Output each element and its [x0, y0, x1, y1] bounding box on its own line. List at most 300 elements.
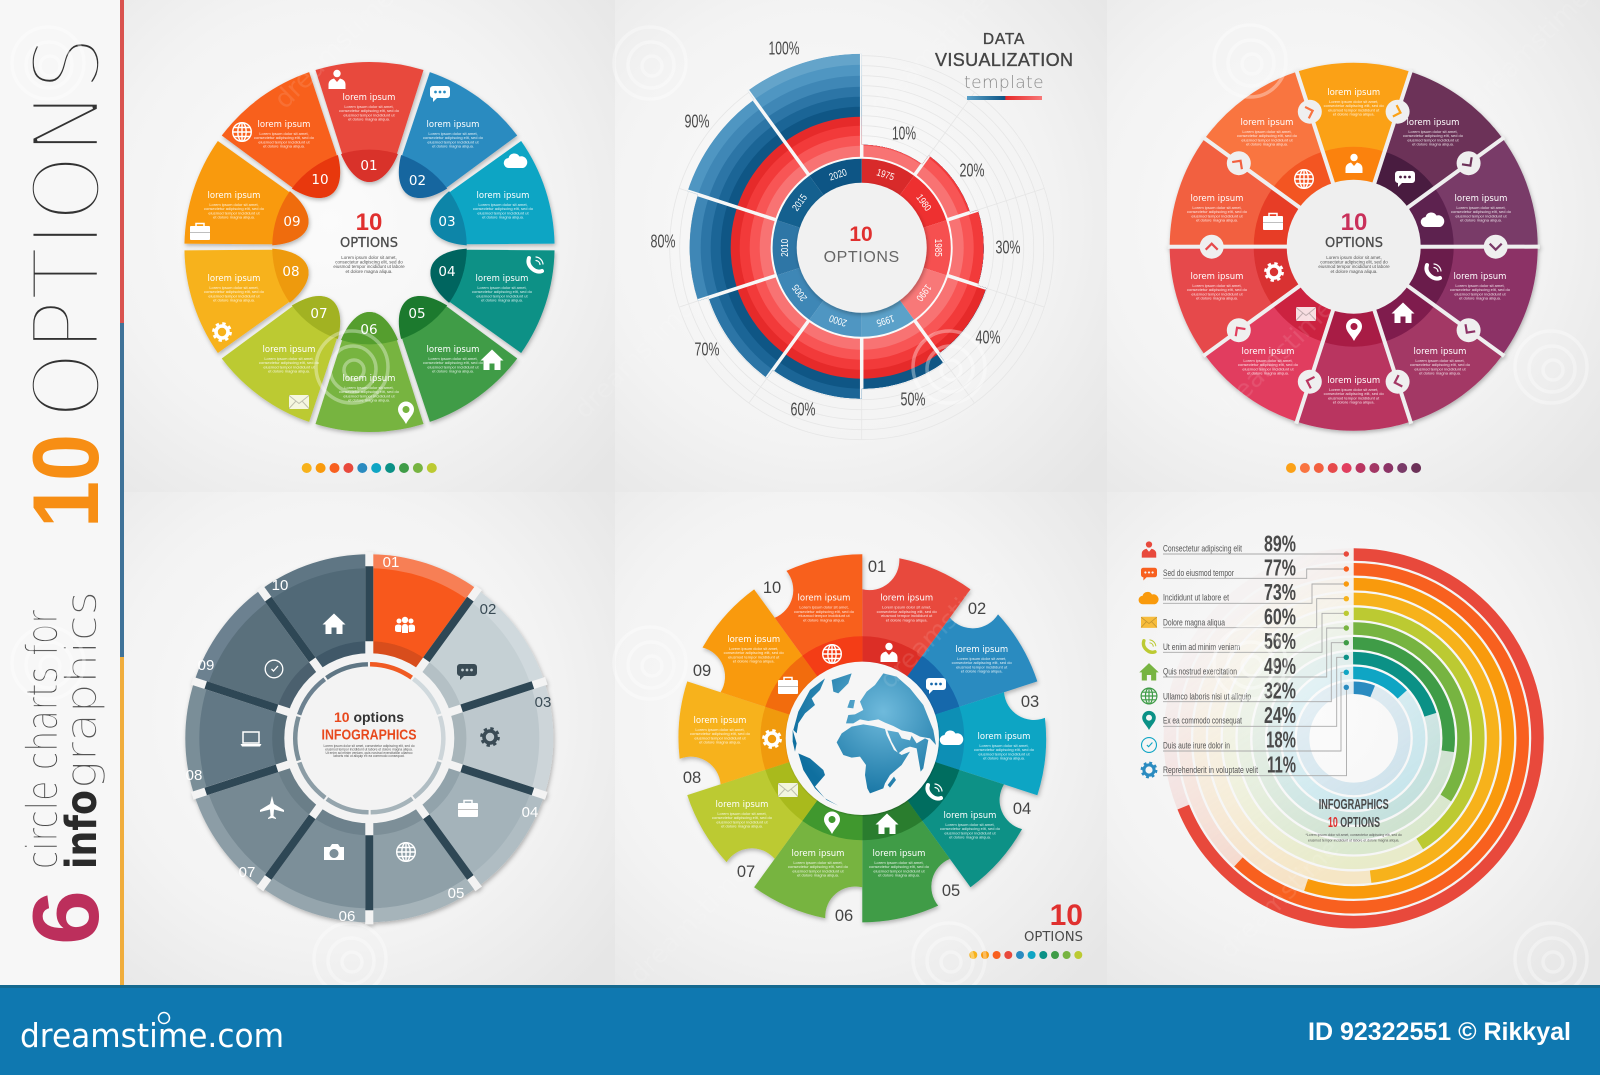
percent labels: 20% — [960, 160, 984, 180]
chevron connectors — [1200, 100, 1508, 394]
option 01: consectetur adipiscing elit, sed do — [1324, 103, 1384, 108]
option 02: et dolore magna aliqua. — [432, 144, 474, 149]
centre heading: 10 OPTIONS — [1328, 814, 1380, 831]
option 08 — [177, 216, 324, 356]
option 05 — [1392, 302, 1471, 376]
list row 10: 11% — [1267, 751, 1296, 777]
option 05: et dolore magna aliqua. — [1419, 371, 1461, 376]
option 03: Lorem ipsum dolor sit amet, — [1456, 205, 1506, 210]
list row 3 — [1139, 579, 1296, 605]
option 09 — [693, 635, 798, 694]
option 09: eiusmod tempor incididunt ut — [1191, 213, 1243, 218]
option 03: Lorem ipsum dolor sit amet, — [478, 202, 528, 207]
centre heading: 10 — [1341, 209, 1367, 236]
title: data visualization template: VISUALIZATION — [935, 50, 1073, 70]
option 04: consectetur adipiscing elit, sed do — [940, 826, 1001, 831]
centre heading — [1318, 209, 1390, 274]
option 02: consectetur adipiscing elit, sed do — [952, 660, 1012, 665]
corner heading: 10 — [1050, 899, 1083, 932]
sector numbers: 04 — [522, 804, 538, 821]
option 04: Lorem ipsum dolor sit amet, — [477, 285, 527, 290]
option 03 — [415, 138, 562, 278]
option 02: consectetur adipiscing elit, sed do — [423, 135, 484, 140]
option 04 — [927, 784, 1031, 840]
option 01: consectetur adipiscing elit, sed do — [339, 108, 400, 113]
option 06: lorem ipsum — [343, 374, 395, 384]
option 09: et dolore magna aliqua. — [1196, 218, 1238, 223]
colour dots — [1286, 463, 1421, 473]
centre heading: et dolore magna aliqua. — [1330, 269, 1378, 274]
percent labels: 50% — [900, 390, 926, 410]
wheel segments — [1128, 15, 1579, 478]
option 03: et dolore magna aliqua. — [482, 215, 524, 220]
sector numbers: 07 — [239, 864, 255, 881]
watermark marks: dreamstime — [874, 563, 1005, 695]
sidebar colour rule — [120, 0, 124, 985]
option 10: consectetur adipiscing elit, sed do — [794, 609, 855, 614]
option 06: et dolore magna aliqua. — [797, 873, 839, 878]
percent labels: 60% — [790, 400, 816, 420]
centre heading: 10 options — [334, 709, 404, 725]
percent labels: 100% — [768, 38, 800, 58]
watermark marks: dreamstime — [1209, 293, 1340, 425]
centre heading: OPTIONS — [1325, 236, 1383, 251]
option 03: lorem ipsum — [1455, 194, 1507, 204]
list row 2 — [1141, 554, 1296, 580]
option 10: eiusmod tempor incididunt ut — [1241, 137, 1293, 142]
heading: 6: 6 — [13, 890, 118, 945]
centre heading: 10 — [849, 223, 873, 246]
list row 5: 56% — [1264, 628, 1296, 654]
option 01 — [1324, 88, 1384, 173]
leader lines — [1163, 554, 1346, 776]
background radial grid — [670, 56, 1054, 440]
option 02: et dolore magna aliqua. — [961, 669, 1003, 674]
option 03: lorem ipsum — [477, 191, 529, 201]
option 08: lorem ipsum — [694, 716, 746, 726]
percent labels: 10% — [892, 124, 916, 144]
option 01: eiusmod tempor incididunt ut — [343, 112, 395, 117]
option 01: Lorem ipsum dolor sit amet, — [344, 104, 394, 109]
option 08: et dolore magna aliqua. — [213, 298, 255, 303]
watermark marks: dreamstime — [624, 858, 755, 990]
percent labels: 40% — [976, 328, 1000, 348]
centre heading — [333, 209, 405, 274]
option 06: eiusmod tempor incididunt ut — [343, 393, 395, 398]
option 07: et dolore magna aliqua. — [268, 369, 310, 374]
colour dots — [302, 463, 437, 473]
option 02: lorem ipsum — [427, 120, 479, 130]
option 09: 09 — [693, 662, 711, 680]
option 02: lorem ipsum — [955, 645, 1008, 655]
panel: chart 3 chevron wheel — [1128, 15, 1579, 478]
option 06: lorem ipsum — [1327, 376, 1380, 386]
list row 7: Ullamco laboris nisi ut aliquip — [1163, 691, 1251, 702]
centre heading — [322, 709, 416, 758]
option 07 — [1238, 307, 1316, 376]
option 07: eiusmod tempor incididunt ut — [716, 819, 768, 824]
option 01: Lorem ipsum dolor sit amet, — [1329, 99, 1378, 104]
globe — [786, 662, 939, 815]
centre heading: eiusmod tempor incididunt ut labore — [1318, 264, 1390, 269]
option 03: consectetur adipiscing elit, sed do — [473, 206, 534, 211]
centre heading: laboris nisi ut aliquip ex ea commodo consequat. — [333, 754, 405, 758]
year ring: 2000 — [828, 312, 848, 328]
wheel segments — [658, 529, 1067, 948]
option 06 — [316, 312, 424, 432]
option 09: et dolore magna aliqua. — [213, 215, 255, 220]
option 10 — [217, 66, 375, 226]
option 08 — [1187, 264, 1282, 301]
centre heading: Lorem ipsum dolor sit amet, consectetur adipiscing elit, sed do — [323, 744, 415, 748]
option 10: et dolore magna aliqua. — [1246, 142, 1288, 147]
option 05: Lorem ipsum dolor sit amet, — [1415, 358, 1465, 363]
option 07: lorem ipsum — [716, 800, 768, 810]
option 05: 05 — [408, 306, 426, 322]
option 08: lorem ipsum — [1191, 272, 1243, 282]
option 08: Lorem ipsum dolor sit amet, — [1192, 283, 1242, 288]
option 08: et dolore magna aliqua. — [1196, 296, 1238, 301]
panel: chart 5 globe wheel — [658, 529, 1083, 959]
list row 9 — [1142, 727, 1296, 753]
option 09: consectetur adipiscing elit, sed do — [724, 650, 784, 655]
option 03: lorem ipsum — [978, 732, 1030, 742]
option 06 — [1324, 318, 1384, 405]
option 08: eiusmod tempor incididunt ut — [1191, 291, 1243, 296]
option 08: et dolore magna aliqua. — [699, 740, 741, 745]
option 07: eiusmod tempor incididunt ut — [263, 364, 315, 369]
year ring: 2005 — [790, 282, 810, 303]
percent labels: 90% — [684, 112, 710, 132]
option 10: lorem ipsum — [258, 120, 310, 130]
list row 5: Ut enim ad minim veniam — [1163, 642, 1240, 653]
list row 4: Dolore magna aliqua — [1163, 617, 1226, 628]
option 05: eiusmod tempor incididunt ut — [873, 868, 925, 873]
option 04: 04 — [438, 264, 456, 280]
option 05: lorem ipsum — [1414, 347, 1466, 357]
option 05: lorem ipsum — [427, 345, 479, 355]
option 04: consectetur adipiscing elit, sed do — [1450, 287, 1511, 292]
panel: chart 6 concentric rings — [1139, 530, 1538, 922]
option 10 — [1237, 118, 1313, 188]
option 09: lorem ipsum — [727, 635, 780, 645]
option 05: consectetur adipiscing elit, sed do — [1410, 362, 1471, 367]
centre heading: eiusmod tempor incididunt ut labore et dolore magna aliqua. — [1308, 838, 1399, 842]
option 07: 07 — [310, 306, 328, 322]
option 01: lorem ipsum — [880, 594, 933, 604]
corner heading — [1024, 899, 1083, 945]
option 04: eiusmod tempor incididunt ut — [944, 830, 996, 835]
option 05 — [364, 268, 522, 428]
option 06: et dolore magna aliqua. — [1333, 400, 1375, 405]
option 03: consectetur adipiscing elit, sed do — [1451, 209, 1512, 214]
sector numbers: 09 — [198, 657, 214, 674]
option 06: consectetur adipiscing elit, sed do — [788, 864, 849, 869]
title: data visualization template: DATA — [983, 31, 1025, 48]
list row 3: 73% — [1264, 579, 1296, 605]
option 04: eiusmod tempor incididunt ut — [476, 293, 528, 298]
watermark marks: dreamstime — [569, 293, 700, 425]
option 01: Lorem ipsum dolor sit amet, — [882, 605, 931, 610]
option 08: Lorem ipsum dolor sit amet, — [209, 285, 259, 290]
list row 4 — [1141, 604, 1296, 630]
option 02: eiusmod tempor incididunt ut — [1407, 137, 1459, 142]
option 06: Lorem ipsum dolor sit amet, — [793, 860, 843, 865]
option 03: eiusmod tempor incididunt ut — [477, 210, 529, 215]
percent labels: 80% — [650, 232, 676, 252]
list row 6: Quis nostrud exercitation — [1163, 667, 1237, 678]
option 07 — [712, 783, 798, 881]
option 01 — [316, 62, 424, 182]
option 08: 08 — [683, 769, 701, 787]
option 04: 04 — [1013, 800, 1031, 818]
option 07: consectetur adipiscing elit, sed do — [712, 815, 773, 820]
option 02: Lorem ipsum dolor sit amet, — [428, 131, 478, 136]
list row 2: Sed do eiusmod tempor — [1163, 568, 1234, 579]
option 02: 02 — [968, 600, 986, 618]
option 10: Lorem ipsum dolor sit amet, — [799, 605, 849, 610]
heading: 10: 10 — [13, 434, 118, 528]
option 01: eiusmod tempor incididunt ut — [1328, 107, 1380, 112]
footer logo: dreamstime.com — [20, 1016, 284, 1055]
option 09 — [177, 138, 324, 278]
option 10: eiusmod tempor incididunt ut — [798, 613, 850, 618]
list row 1: 89% — [1264, 530, 1296, 556]
centre heading: *Lorem ipsum dolor sit amet, consectetur adipiscing elit, sed do — [1306, 833, 1402, 837]
option 10: et dolore magna aliqua. — [803, 617, 845, 622]
list row 1: Consectetur adipiscing elit — [1163, 544, 1242, 554]
panel: chart 2 data visualization — [650, 31, 1073, 448]
option 03: Lorem ipsum dolor sit amet, — [979, 743, 1029, 748]
option 04: et dolore magna aliqua. — [1459, 296, 1501, 301]
option 07: et dolore magna aliqua. — [1247, 371, 1289, 376]
option 06: Lorem ipsum dolor sit amet, — [1329, 387, 1378, 392]
option 10: consectetur adipiscing elit, sed do — [1237, 133, 1298, 138]
option 02: 02 — [409, 173, 426, 189]
option 01 — [868, 558, 937, 662]
option 04: Lorem ipsum dolor sit amet, — [1455, 283, 1505, 288]
option 07: Lorem ipsum dolor sit amet, — [264, 356, 314, 361]
sector numbers — [186, 554, 551, 925]
heading: OPTIONS: OPTIONS — [15, 36, 120, 419]
centre heading: consectetur adipiscing elit, sed do — [1320, 260, 1388, 265]
option 07: 07 — [737, 863, 755, 881]
option 08: eiusmod tempor incididunt ut — [694, 735, 746, 740]
year ring: 1975 — [875, 167, 896, 184]
list row 3: Incididunt ut labore et — [1163, 593, 1229, 604]
list row 8 — [1142, 702, 1296, 730]
option 06: 06 — [835, 907, 853, 925]
option 06: eiusmod tempor incididunt ut — [792, 868, 844, 873]
option 02: eiusmod tempor incididunt ut — [427, 139, 479, 144]
petals — [177, 62, 562, 432]
list row 7 — [1141, 678, 1296, 704]
year ring: 2010 — [780, 238, 791, 257]
option 03: 03 — [1021, 693, 1039, 711]
option 07: lorem ipsum — [1242, 347, 1294, 357]
sector numbers: 05 — [448, 885, 464, 902]
option 09: eiusmod tempor incididunt ut — [208, 210, 260, 215]
option 06: 06 — [360, 322, 378, 338]
centre heading: OPTIONS — [340, 236, 398, 251]
option 05 — [869, 814, 960, 900]
subheading: infographics — [57, 591, 107, 869]
option 10 — [763, 579, 855, 663]
option 09: lorem ipsum — [208, 191, 260, 201]
option 02: consectetur adipiscing elit, sed do — [1403, 133, 1464, 138]
option 03 — [1421, 194, 1512, 227]
option 10: 10 — [311, 172, 329, 188]
option 05: et dolore magna aliqua. — [878, 873, 920, 878]
option 05: consectetur adipiscing elit, sed do — [423, 360, 484, 365]
list row 10 — [1142, 751, 1296, 777]
option 08: 08 — [282, 264, 300, 280]
option 09: 09 — [283, 214, 301, 230]
option 06 — [788, 812, 853, 925]
centre heading — [824, 223, 900, 266]
colour dots — [969, 951, 1082, 959]
year ring — [761, 145, 963, 350]
option 09: lorem ipsum — [1191, 194, 1243, 204]
centre heading: INFOGRAPHICS — [1319, 796, 1389, 813]
year ring: 1990 — [913, 282, 933, 303]
option 07: et dolore magna aliqua. — [721, 824, 763, 829]
option 03: eiusmod tempor incididunt ut — [978, 751, 1030, 756]
sector icons — [240, 614, 498, 861]
centre heading: et dolore magna aliqua. — [345, 269, 393, 274]
option 01: consectetur adipiscing elit, sed do — [877, 609, 937, 614]
option 05: Lorem ipsum dolor sit amet, — [874, 860, 924, 865]
option 04: lorem ipsum — [944, 811, 996, 821]
option 07: lorem ipsum — [263, 345, 315, 355]
year ring: 1985 — [932, 239, 943, 257]
sector numbers: 03 — [535, 694, 551, 711]
list row 5 — [1143, 628, 1296, 654]
option 05: et dolore magna aliqua. — [432, 369, 474, 374]
option 06: lorem ipsum — [792, 849, 844, 859]
option 07: consectetur adipiscing elit, sed do — [259, 360, 320, 365]
option 07 — [217, 268, 375, 428]
option 07: Lorem ipsum dolor sit amet, — [1243, 358, 1293, 363]
option 03: et dolore magna aliqua. — [983, 756, 1025, 761]
centre heading — [1306, 796, 1402, 842]
option 10: 10 — [763, 579, 781, 597]
option 03 — [940, 693, 1039, 761]
year ring: 1980 — [913, 193, 933, 214]
option 01: lorem ipsum — [1327, 88, 1380, 98]
option 09: consectetur adipiscing elit, sed do — [1187, 209, 1248, 214]
option 10: lorem ipsum — [798, 594, 850, 604]
option 08 — [683, 716, 780, 787]
sector numbers: 06 — [339, 908, 355, 925]
sector numbers: 01 — [383, 554, 399, 571]
centre heading: OPTIONS — [824, 249, 900, 266]
sector numbers: 08 — [186, 767, 202, 784]
option 01: 01 — [360, 158, 378, 174]
option 08: consectetur adipiscing elit, sed do — [204, 289, 265, 294]
list row 9: 18% — [1266, 727, 1296, 753]
list row 10: Reprehenderit in voluptate velit — [1163, 765, 1258, 776]
subheading: infographics: info — [57, 790, 107, 869]
option 04: consectetur adipiscing elit, sed do — [472, 289, 533, 294]
option 10: et dolore magna aliqua. — [263, 144, 305, 149]
percent labels: 70% — [694, 340, 720, 360]
year ring: 2015 — [790, 192, 810, 214]
ring values — [1170, 554, 1538, 922]
option 02: Lorem ipsum dolor sit amet, — [1408, 129, 1458, 134]
centre heading: eiusmod tempor incididunt ut labore et dolore magna aliqua. — [325, 747, 413, 751]
option 04: eiusmod tempor incididunt ut — [1454, 291, 1506, 296]
option 07: eiusmod tempor incididunt ut — [1242, 366, 1294, 371]
option 06: et dolore magna aliqua. — [348, 398, 390, 403]
option 05: lorem ipsum — [873, 849, 925, 859]
option 03: consectetur adipiscing elit, sed do — [974, 747, 1035, 752]
option 09: Lorem ipsum dolor sit amet, — [209, 202, 259, 207]
title: data visualization template: template — [964, 73, 1044, 93]
list row 2: 77% — [1264, 554, 1296, 580]
watermark marks: dreamstime — [1214, 833, 1345, 965]
option 10: eiusmod tempor incididunt ut — [258, 139, 310, 144]
year ring: 1995 — [875, 312, 895, 328]
option 06: Lorem ipsum dolor sit amet, — [344, 385, 394, 390]
subheading: circle charts for: circle charts for — [18, 610, 68, 869]
option 02 — [364, 66, 522, 226]
sidebar: vertical title — [13, 0, 124, 985]
centre heading: Lorem ipsum dolor sit amet, — [1326, 255, 1382, 260]
image credit: ID 92322551 © Rikkyal — [1308, 1018, 1571, 1046]
option 08: lorem ipsum — [208, 274, 260, 284]
centre heading: 10 — [356, 209, 382, 236]
sector numbers: 02 — [480, 601, 496, 618]
list row 6 — [1139, 653, 1296, 680]
percent labels: 30% — [996, 238, 1020, 258]
centre heading: INFOGRAPHICS — [322, 726, 416, 744]
option 09: Lorem ipsum dolor sit amet, — [1192, 205, 1242, 210]
option 01: et dolore magna aliqua. — [886, 617, 928, 622]
option 09: eiusmod tempor incididunt ut — [728, 654, 780, 659]
option 10: Lorem ipsum dolor sit amet, — [1242, 129, 1292, 134]
option 03: et dolore magna aliqua. — [1460, 218, 1502, 223]
option 01: lorem ipsum — [343, 93, 395, 103]
option 02 — [1395, 118, 1464, 187]
leader dots — [1344, 551, 1349, 690]
list row 9: Duis aute irure dolor in — [1163, 740, 1230, 751]
option 02: Lorem ipsum dolor sit amet, — [957, 656, 1006, 661]
panel: chart 4 grey wheel — [161, 526, 578, 951]
option 09: consectetur adipiscing elit, sed do — [204, 206, 265, 211]
centre heading: Lorem ipsum dolor sit amet, — [341, 255, 397, 260]
option 01: et dolore magna aliqua. — [1333, 112, 1375, 117]
option 06: consectetur adipiscing elit, sed do — [1324, 391, 1384, 396]
option 08: eiusmod tempor incididunt ut — [208, 293, 260, 298]
option 04: et dolore magna aliqua. — [949, 835, 991, 840]
stepped radial bars — [688, 54, 986, 399]
option 03: 03 — [438, 214, 456, 230]
option 08: consectetur adipiscing elit, sed do — [1187, 287, 1248, 292]
list row 1 — [1142, 530, 1296, 558]
subheading: infographics: graphics — [57, 591, 107, 789]
option 02 — [926, 600, 1012, 694]
title: data visualization template — [935, 31, 1073, 100]
wheel sectors — [161, 526, 578, 951]
sector numbers: 10 — [272, 577, 288, 594]
option 02: lorem ipsum — [1407, 118, 1459, 128]
option 02: et dolore magna aliqua. — [1412, 142, 1454, 147]
option 05: Lorem ipsum dolor sit amet, — [428, 356, 478, 361]
option 05: consectetur adipiscing elit, sed do — [869, 864, 930, 869]
option 08: consectetur adipiscing elit, sed do — [690, 731, 751, 736]
option 10: Lorem ipsum dolor sit amet, — [259, 131, 309, 136]
